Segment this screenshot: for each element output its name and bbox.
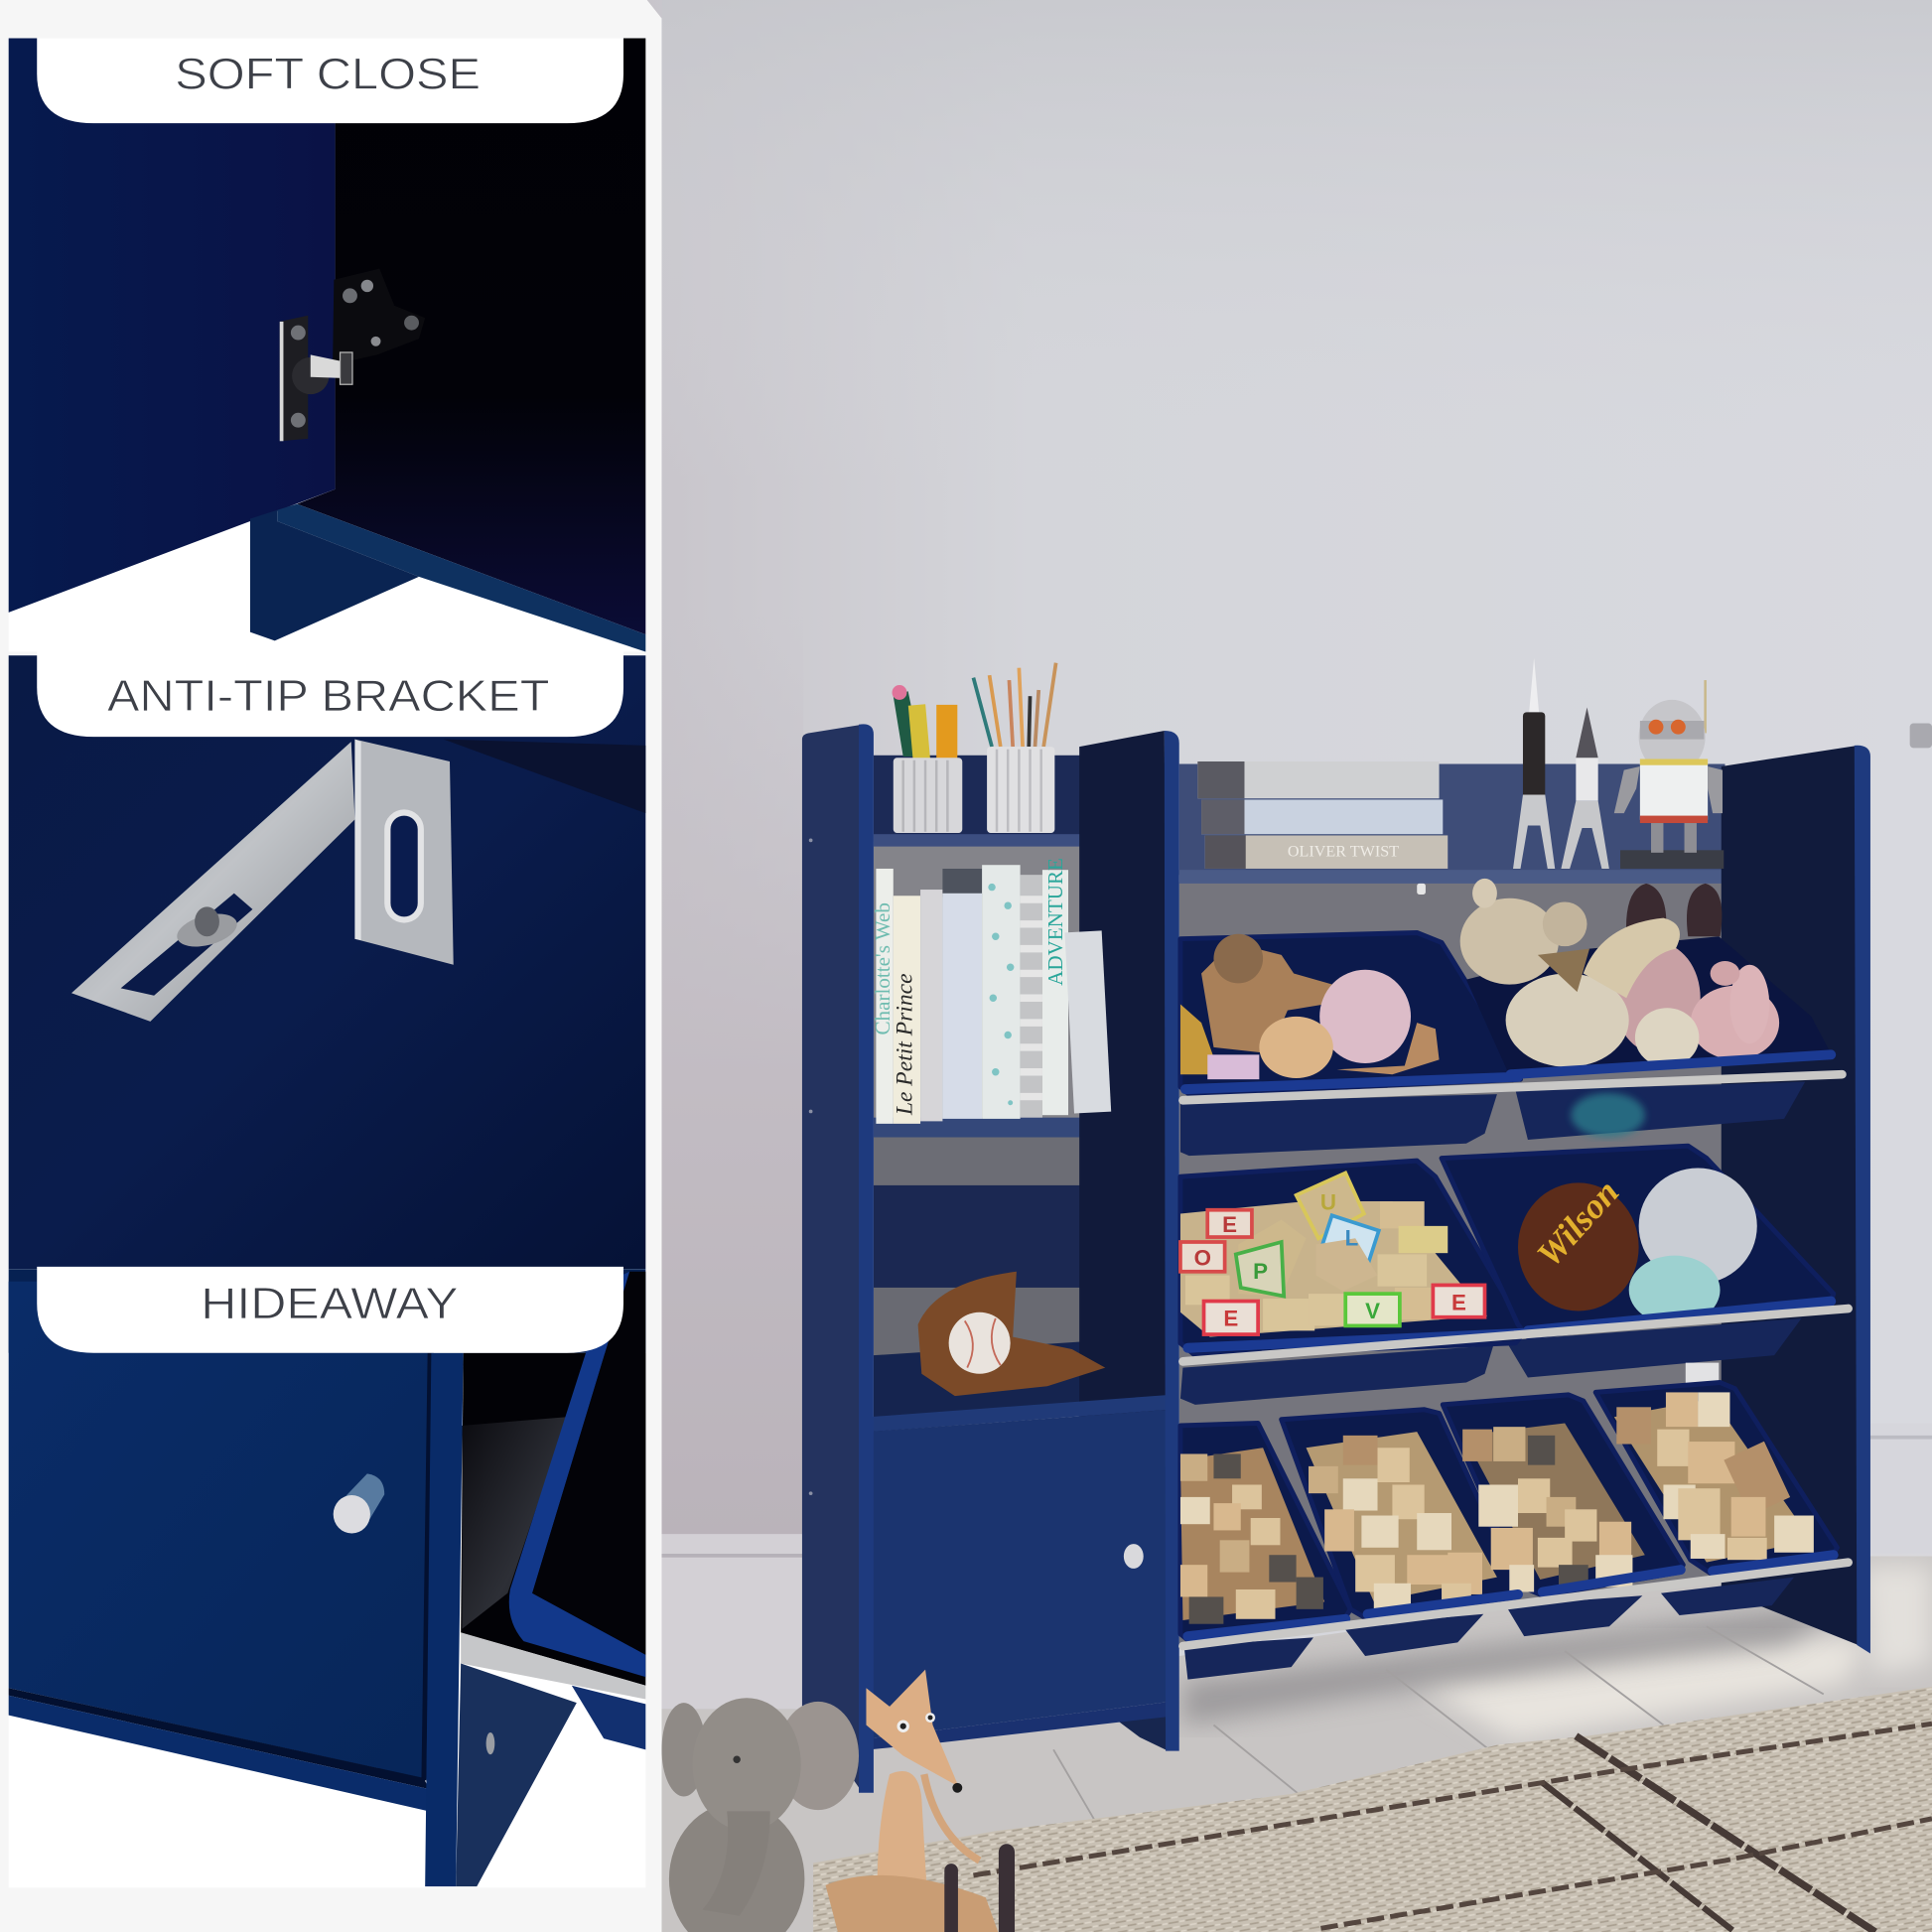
panel: room scene <box>647 0 1932 1932</box>
heading: SOFT CLOSE <box>175 50 481 98</box>
rug <box>813 1687 1932 1932</box>
bin 6 with blocks <box>1282 1410 1520 1618</box>
bin front lips <box>1187 1555 1834 1636</box>
toy: plush elephant <box>661 1698 859 1932</box>
block letters <box>1194 1190 1466 1330</box>
bin 2 <box>1466 936 1831 1079</box>
cabinet leg <box>250 510 419 640</box>
front rail <box>1182 1074 1842 1100</box>
heading: ANTI-TIP BRACKET <box>107 672 550 721</box>
bin front lips <box>1187 1302 1831 1348</box>
bins: row 2 <box>1180 1146 1849 1405</box>
football: Wilson <box>1529 1173 1626 1275</box>
interior board <box>462 1417 567 1629</box>
wall hook <box>1910 724 1932 748</box>
bin front lips <box>1185 1054 1831 1089</box>
cup right <box>987 747 1054 833</box>
wooden ball <box>1259 1017 1333 1078</box>
left side panel <box>802 724 874 1793</box>
items: stacked books top shelf <box>1197 761 1448 869</box>
panel: hideaway <box>9 1267 645 1887</box>
bin 1 <box>1180 932 1520 1094</box>
baseboards <box>661 1423 1932 1709</box>
book title: OLIVER TWIST <box>1288 844 1399 861</box>
bin 8 with blocks <box>1595 1382 1837 1575</box>
left column shelves <box>874 834 1166 1432</box>
white ball <box>1639 1169 1757 1284</box>
plush pink elephant <box>1614 884 1722 1053</box>
bin corner <box>509 1272 645 1677</box>
bins: row 1 <box>1180 879 1842 1156</box>
markers <box>893 685 957 759</box>
label tab <box>37 649 623 737</box>
central divider leg <box>1115 1707 1169 1751</box>
block letters: P <box>1253 1259 1268 1284</box>
central divider side <box>1079 731 1169 1417</box>
block letters: O <box>1194 1246 1211 1271</box>
right side panel <box>1722 746 1870 1654</box>
door <box>9 1282 434 1780</box>
bottom frame <box>9 1696 429 1811</box>
toy: wooden fox <box>826 1670 1007 1932</box>
shelf edge <box>277 504 645 652</box>
cabinet door <box>869 1395 1171 1749</box>
mint ball <box>1629 1256 1721 1324</box>
front edge <box>425 1353 464 1886</box>
heading: HIDEAWAY <box>201 1280 459 1328</box>
central divider front edge <box>1165 731 1179 1751</box>
door inner face <box>9 38 336 613</box>
label tab <box>37 38 623 123</box>
left column back <box>874 756 1083 1361</box>
icon: hinge <box>280 269 425 441</box>
bin 7 with blocks <box>1443 1395 1683 1595</box>
panel: soft close <box>0 0 661 1932</box>
upper right back panel <box>1179 763 1725 875</box>
small wall plug <box>1417 884 1426 895</box>
cabinet interior <box>297 38 645 634</box>
top shelf right <box>1179 870 1861 884</box>
leg side face <box>456 1663 577 1886</box>
football <box>1518 1173 1639 1311</box>
door gap line <box>9 1688 429 1789</box>
door right gap line <box>421 1353 433 1780</box>
alphabet blocks <box>1180 1173 1487 1337</box>
icon: door knob <box>334 1473 384 1534</box>
post between rows <box>1686 1363 1719 1387</box>
interior <box>461 1353 645 1686</box>
block letters: L <box>1345 1226 1358 1251</box>
label tab <box>37 1267 623 1353</box>
floor <box>661 1556 1932 1932</box>
teddy bear <box>1460 879 1699 1067</box>
icon: metal bracket <box>71 740 454 1022</box>
block letters: E <box>1451 1290 1466 1314</box>
cup left <box>894 758 962 833</box>
pencils <box>973 663 1056 747</box>
items: book row <box>871 858 1111 1124</box>
block letters: V <box>1365 1299 1380 1323</box>
items: toy robot <box>1614 680 1724 869</box>
panel: toy shelf unit <box>802 658 1870 1793</box>
book title: Le Petit Prince <box>892 973 917 1116</box>
bin bottom <box>572 1686 645 1749</box>
items: top left cups and pencils <box>893 663 1056 833</box>
block letters: U <box>1320 1190 1336 1215</box>
bin bottoms <box>1180 1094 1497 1156</box>
items: baseball glove <box>918 1272 1105 1396</box>
panel background <box>9 1269 645 1887</box>
block letters: E <box>1222 1212 1237 1237</box>
block letters: E <box>1223 1306 1238 1330</box>
rail <box>461 1632 645 1699</box>
wall <box>647 0 1932 1932</box>
items: toy rockets <box>1513 658 1609 869</box>
book title: Charlotte's Web <box>871 902 895 1035</box>
panel background <box>9 655 645 1269</box>
wooden toy plane <box>1180 934 1440 1079</box>
panel frame <box>0 0 661 1932</box>
back wall shadow behind bins <box>1179 883 1725 1649</box>
bins: row 3 <box>1180 1382 1849 1680</box>
door knob <box>1124 1544 1144 1569</box>
panel: anti-tip bracket <box>9 649 645 1269</box>
plush bunny <box>1691 961 1779 1059</box>
bin 5 with blocks <box>1180 1423 1350 1640</box>
book title: ADVENTURE <box>1043 858 1067 986</box>
pink ball <box>1319 970 1411 1063</box>
